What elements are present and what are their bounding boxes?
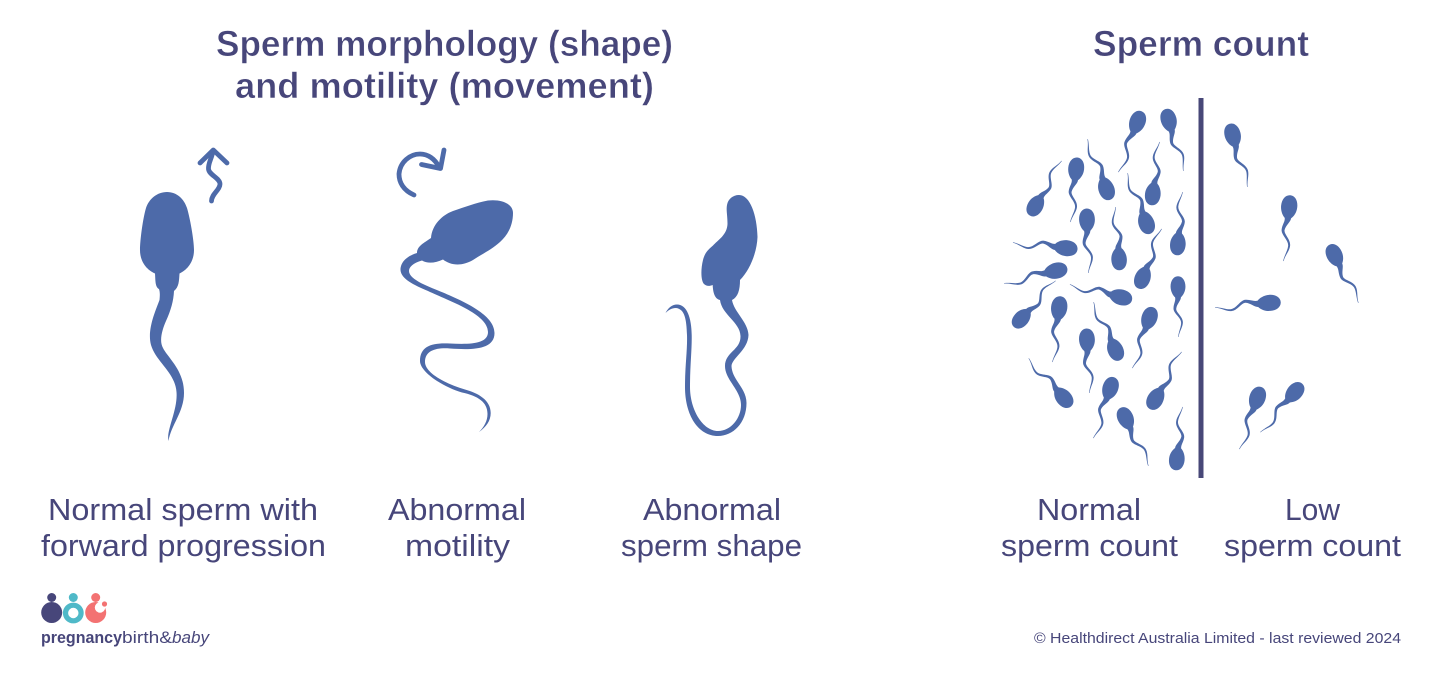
label: low sperm count	[1224, 492, 1401, 563]
logo: pregnancy birth and baby: birth&	[122, 628, 173, 647]
label: abnormal sperm shape: Abnormal	[643, 492, 781, 527]
logo: pregnancy birth and baby: baby	[172, 628, 210, 647]
illustration: normal sperm	[140, 192, 194, 441]
illustration: abnormal shape sperm	[666, 195, 758, 436]
icon: circular rotating arrow	[399, 150, 444, 195]
label: low sperm count: Low	[1285, 492, 1341, 527]
label: normal sperm count: Normal	[1037, 492, 1141, 527]
heading: sperm morphology and motility: Sperm morphology (shape)	[216, 23, 673, 64]
label: abnormal sperm shape	[621, 492, 802, 563]
divider between normal and low count	[1198, 98, 1204, 478]
label: abnormal motility	[388, 492, 526, 563]
copyright note: © Healthdirect Australia Limited - last reviewed 2024	[1034, 630, 1401, 647]
illustration: normal sperm count cluster	[1002, 107, 1191, 471]
heading: sperm morphology and motility	[216, 23, 673, 106]
label: normal sperm with forward progression: Normal sperm with	[48, 492, 318, 527]
logo: pregnancy birth and baby	[41, 593, 210, 647]
heading: sperm count: Sperm count	[1093, 23, 1309, 64]
logo: pregnancy birth and baby: pregnancy	[41, 628, 123, 647]
label: low sperm count: sperm count	[1224, 528, 1401, 563]
illustration: low sperm count cluster	[1214, 122, 1365, 452]
label: normal sperm with forward progression	[41, 492, 326, 563]
label: normal sperm with forward progression: forward progression	[41, 528, 326, 563]
icon: forward wavy arrow	[200, 150, 227, 201]
label: normal sperm count	[1001, 492, 1178, 563]
illustration: abnormal motility sperm	[400, 200, 513, 432]
label: abnormal sperm shape: sperm shape	[621, 528, 802, 563]
label: abnormal motility: motility	[405, 528, 511, 563]
label: abnormal motility: Abnormal	[388, 492, 526, 527]
heading: sperm morphology and motility: and motility (movement)	[235, 65, 654, 106]
label: normal sperm count: sperm count	[1001, 528, 1178, 563]
